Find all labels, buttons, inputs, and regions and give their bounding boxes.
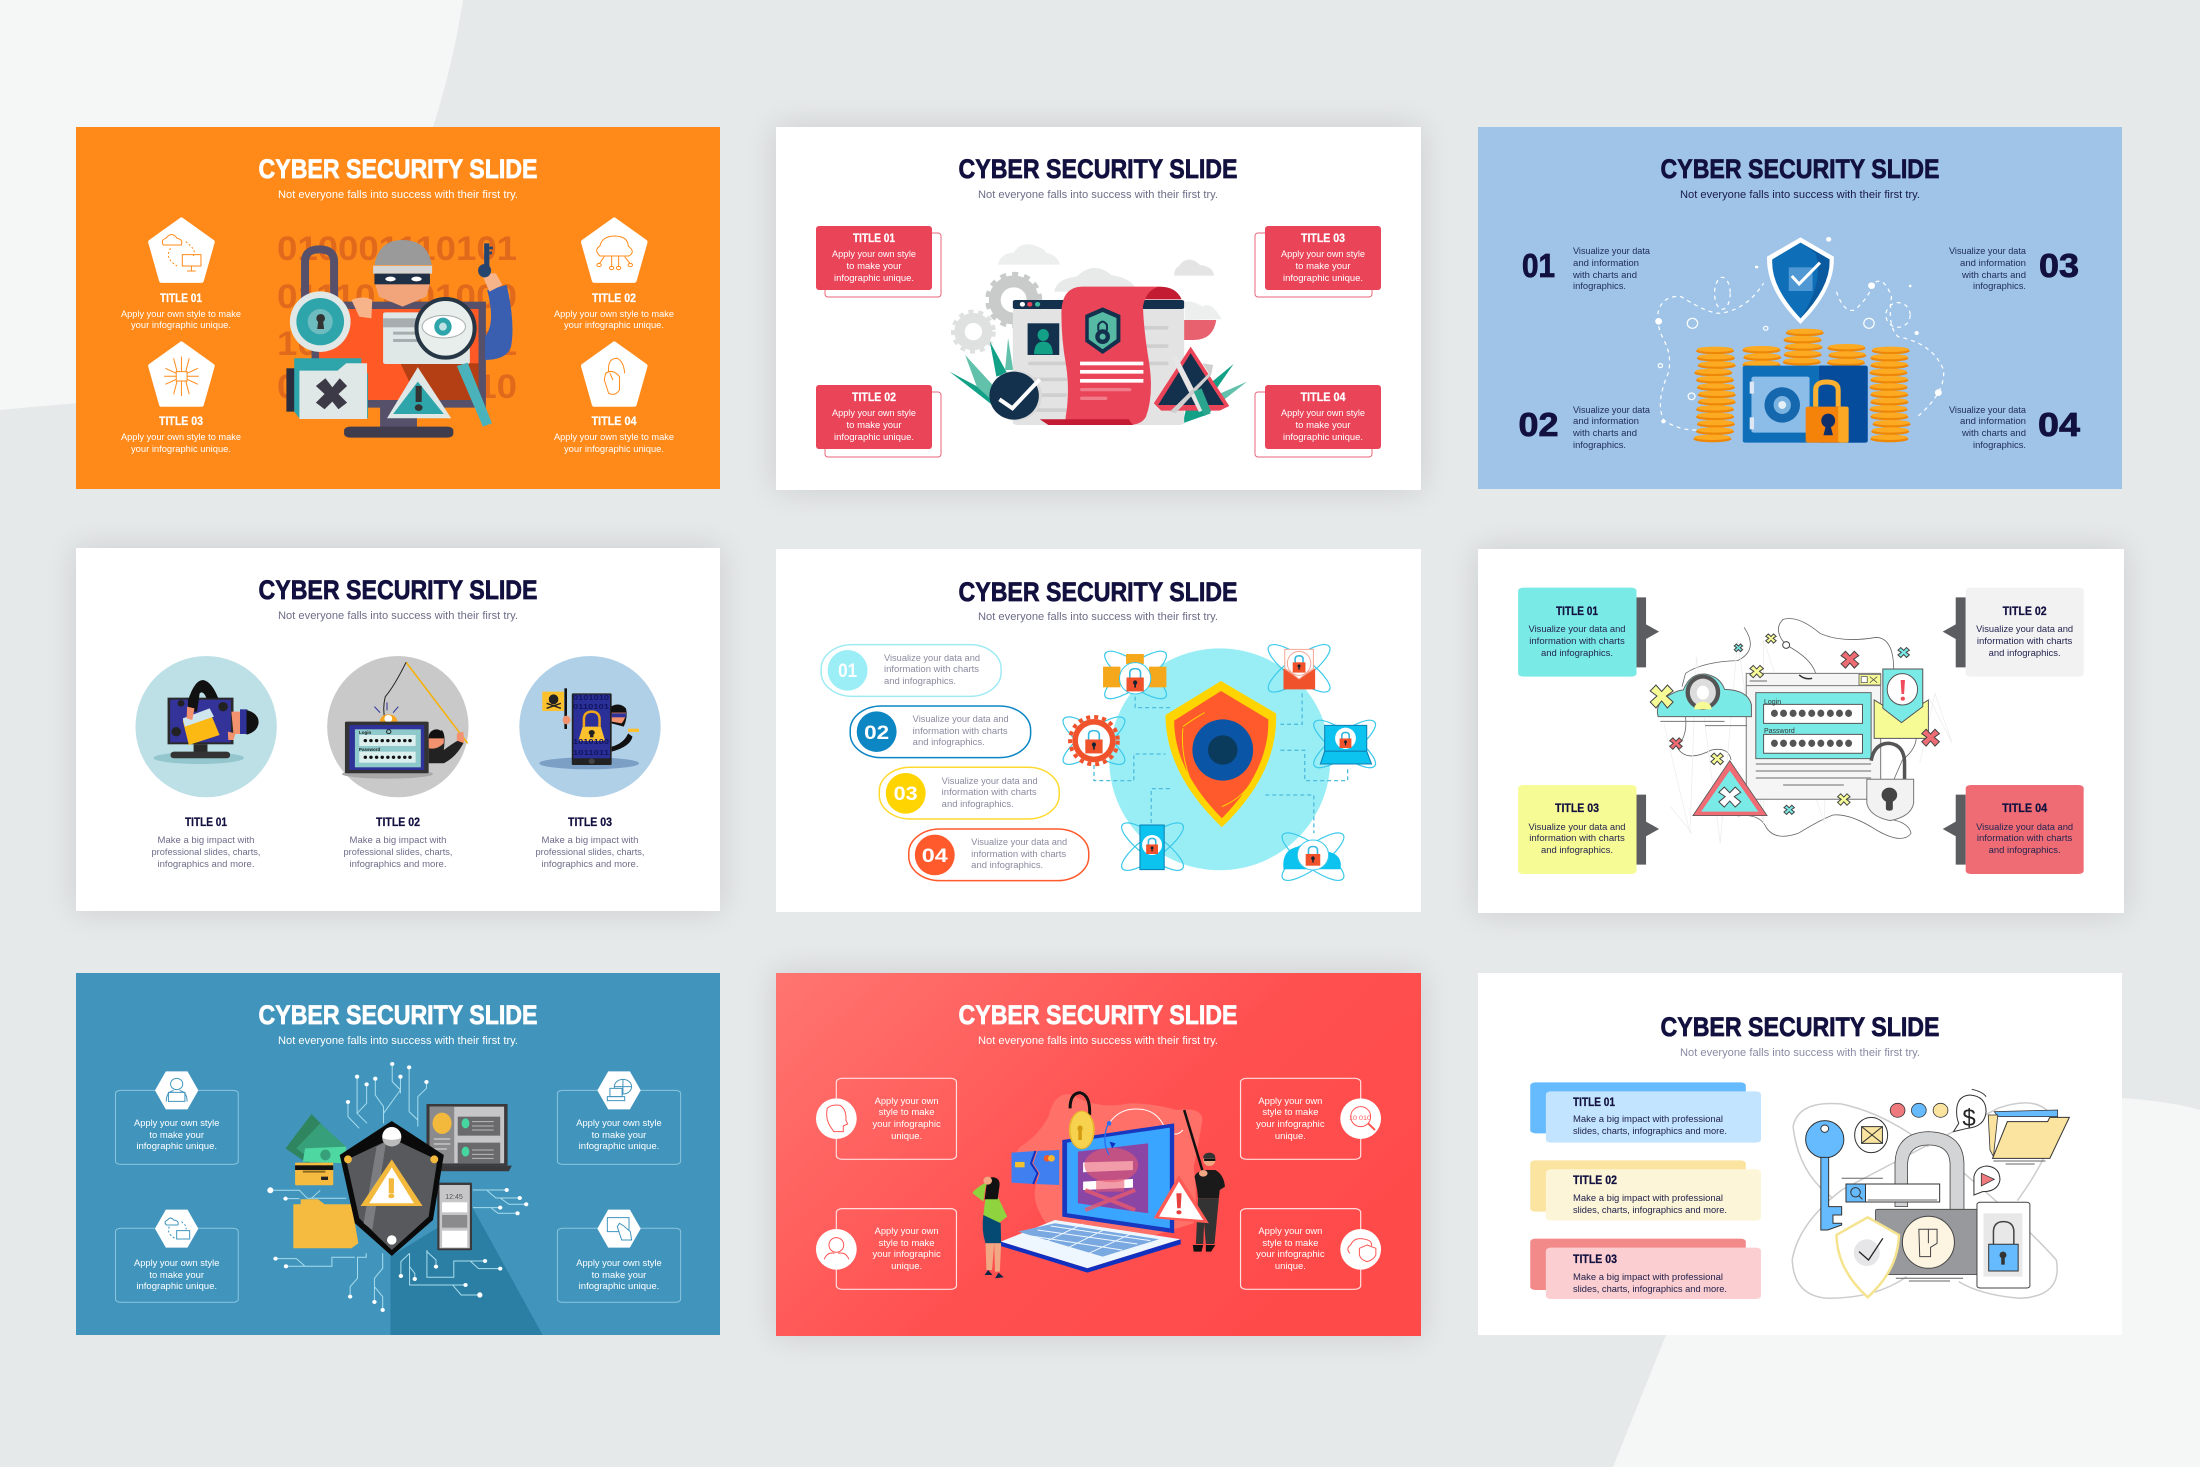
title: CYBER SECURITY SLIDE	[958, 1000, 1238, 1030]
binary text on phone: 0110101	[573, 702, 609, 711]
card: title 02	[1530, 1160, 1761, 1221]
binary digits background: 010010101110	[277, 368, 517, 406]
panel background	[776, 127, 1421, 490]
item: number 03: with charts and	[1961, 270, 2026, 280]
box: bottom left	[816, 1209, 956, 1289]
callout: title 02: Visualize your data and	[1976, 624, 2073, 634]
box: top left: unique.	[891, 1131, 922, 1141]
box: top right: your infographic	[1256, 1119, 1325, 1129]
panel shadow	[776, 127, 1421, 490]
callout: title 04: Visualize your data and	[1976, 822, 2073, 832]
box: title 04: to make your	[1296, 420, 1351, 430]
panel: slide 3 blue with coins	[1478, 127, 2122, 489]
item: number 03: Visualize your data	[1949, 246, 2026, 256]
callout: title 01: information with charts	[1529, 636, 1625, 646]
callout: title 02	[1943, 588, 2084, 677]
box: bottom right: Apply your own	[1258, 1226, 1323, 1236]
panel shadow	[1478, 549, 2124, 913]
box: title 01: Apply your own style	[832, 249, 916, 259]
item: title 02	[344, 815, 452, 869]
illustration: circle 1 hacker stealing folder	[135, 656, 277, 797]
binary text on phone	[573, 693, 609, 757]
item: title 01: TITLE 01	[185, 815, 227, 829]
card: title 03	[1530, 1239, 1761, 1299]
box: bottom left: style to make	[879, 1238, 935, 1248]
background light shape: top left	[0, 0, 463, 410]
card: title 01: TITLE 01	[1573, 1095, 1615, 1109]
pill 01: information with charts	[884, 664, 980, 674]
title: CYBER SECURITY SLIDE	[1660, 154, 1940, 184]
box: bottom left: infographic unique.	[136, 1281, 217, 1291]
box: title 01: TITLE 01	[853, 231, 895, 245]
item: title 04: your infographic unique.	[564, 444, 664, 454]
item: title 01: your infographic unique.	[131, 320, 231, 330]
pill 03	[879, 767, 1059, 819]
box: bottom left: to make your	[149, 1270, 204, 1280]
item: number 02	[1518, 405, 1650, 450]
callout: title 04: and infographics.	[1989, 845, 2061, 855]
subtitle: Not everyone falls into success with their first try.	[978, 1035, 1218, 1047]
background light shape: bottom right	[1613, 1098, 2200, 1467]
pill 03: 03	[894, 784, 918, 805]
title: CYBER SECURITY SLIDE	[958, 154, 1238, 184]
subtitle: Not everyone falls into success with their first try.	[1680, 1047, 1920, 1059]
item: number 01: and information	[1573, 258, 1639, 268]
box: title 03: to make your	[1296, 261, 1351, 271]
panel background	[76, 973, 720, 1335]
illustration: phishing login window	[1650, 618, 1952, 843]
pill 01: 01	[838, 661, 857, 682]
callout: title 03: TITLE 03	[1555, 801, 1599, 815]
label: phone clock: 12:45	[445, 1194, 463, 1201]
panel: slide 5 white with pills and shield	[776, 549, 1421, 912]
item: number 01: Visualize your data	[1573, 246, 1650, 256]
box: bottom left: unique.	[891, 1261, 922, 1271]
pill 03: Visualize your data and	[942, 776, 1038, 786]
title: CYBER SECURITY SLIDE	[258, 1000, 538, 1030]
box: top left: to make your	[149, 1130, 204, 1140]
box: title 03: Apply your own style	[1281, 249, 1365, 259]
callout: title 03: and infographics.	[1541, 845, 1613, 855]
subtitle: Not everyone falls into success with their first try.	[1680, 189, 1920, 201]
box: bottom right: infographic unique.	[579, 1281, 659, 1291]
panel background	[1478, 127, 2122, 489]
binary digits background: 010001110101	[277, 230, 517, 268]
item: title 01: Apply your own style to make	[121, 309, 241, 319]
pill 01: Visualize your data and	[884, 653, 980, 663]
item: title 01: TITLE 01	[160, 291, 202, 305]
box: title 04: Apply your own style	[1281, 408, 1365, 418]
box: top left: infographic unique.	[136, 1141, 217, 1151]
icon: cloud to monitor pentagon	[151, 220, 212, 280]
box: title 03	[1255, 226, 1381, 297]
illustration: hacked laptop	[973, 1093, 1225, 1278]
box: bottom left: Apply your own	[875, 1226, 939, 1236]
box: top right: to make your	[592, 1130, 646, 1140]
title: CYBER SECURITY SLIDE	[258, 154, 538, 184]
illustration: security document	[950, 244, 1247, 425]
item: title 03: infographics and more.	[542, 859, 638, 869]
box: title 04: infographic unique.	[1283, 432, 1363, 442]
box: title 02	[816, 385, 941, 457]
box: title 01: to make your	[846, 261, 902, 271]
box: bottom right: your infographic	[1256, 1249, 1325, 1259]
box: bottom right: to make your	[592, 1270, 646, 1280]
box: title 01	[816, 226, 941, 297]
box: title 03: TITLE 03	[1301, 231, 1345, 245]
item: number 04: 04	[2038, 406, 2081, 443]
box: top right: Apply your own	[1258, 1096, 1323, 1106]
box: title 04	[1255, 385, 1381, 457]
binary text on phone: 1010100	[573, 737, 609, 746]
card: title 03: slides, charts, infographics and more.	[1573, 1284, 1727, 1294]
illustration: circle 3 phone with lock	[519, 656, 661, 797]
callout: title 04: information with charts	[1977, 833, 2073, 843]
subtitle: Not everyone falls into success with their first try.	[978, 611, 1218, 623]
label: login: Login	[1764, 699, 1781, 706]
panel: slide 6 white with four callouts	[1478, 549, 2124, 913]
card: title 02: Make a big impact with professional	[1573, 1193, 1723, 1203]
item: number 02: and information	[1573, 416, 1639, 426]
box: title 04: TITLE 04	[1300, 390, 1346, 404]
binary digits background	[277, 230, 517, 406]
icon: chip pentagon	[151, 344, 212, 404]
item: title 03: Make a big impact with	[542, 835, 639, 845]
box: bottom left: Apply your own style	[134, 1258, 220, 1268]
box: bottom right: unique.	[1275, 1261, 1306, 1271]
item: title 02: infographics and more.	[350, 859, 446, 869]
card: title 03: TITLE 03	[1573, 1252, 1617, 1266]
item: title 03	[536, 815, 644, 869]
box: top left	[116, 1071, 238, 1164]
pill 03: information with charts	[942, 787, 1037, 797]
panel background	[776, 549, 1421, 912]
title: CYBER SECURITY SLIDE	[1660, 1012, 1940, 1042]
callout: title 02: information with charts	[1977, 636, 2073, 646]
panel shadow	[776, 973, 1421, 1336]
item: title 02: TITLE 02	[376, 815, 420, 829]
box: top left: your infographic	[872, 1119, 942, 1129]
box: bottom right	[1241, 1209, 1381, 1289]
callout: title 03	[1518, 785, 1659, 874]
box: top right: style to make	[1262, 1107, 1319, 1117]
callout: title 02: TITLE 02	[2003, 604, 2047, 618]
item: number 04: and information	[1960, 416, 2026, 426]
box: title 02: Apply your own style	[832, 408, 916, 418]
pill 04: Visualize your data and	[971, 837, 1067, 847]
callout: title 01: Visualize your data and	[1528, 624, 1626, 634]
item: number 02: infographics.	[1573, 440, 1626, 450]
item: number 04: Visualize your data	[1949, 405, 2026, 415]
item: title 02: your infographic unique.	[564, 320, 664, 330]
item: title 02: TITLE 02	[592, 291, 636, 305]
panel: slide 8 red with laptop	[776, 973, 1421, 1336]
binary text on phone: 1011011	[573, 748, 609, 757]
item: number 03: 03	[2039, 247, 2079, 284]
panel shadow	[76, 548, 720, 911]
illustration: shield and secured devices	[1055, 639, 1383, 886]
pill 04: information with charts	[971, 849, 1067, 859]
item: title 02: Make a big impact with	[350, 835, 447, 845]
subtitle: Not everyone falls into success with their first try.	[978, 189, 1218, 201]
item: number 04	[1949, 405, 2081, 450]
label: password: Password	[359, 747, 381, 752]
pill 02: and infographics.	[913, 737, 985, 747]
label: password: Password	[1764, 728, 1795, 735]
item: title 01: professional slides, charts,	[152, 847, 260, 857]
subtitle: Not everyone falls into success with their first try.	[278, 1035, 518, 1047]
panel background	[76, 127, 720, 489]
pill 01	[821, 645, 1001, 696]
panel background	[1478, 549, 2124, 913]
box: top left: Apply your own	[875, 1096, 939, 1106]
card: title 01: Make a big impact with professional	[1573, 1114, 1723, 1124]
item: number 01: infographics.	[1573, 281, 1626, 291]
item: title 01	[152, 815, 260, 869]
illustration: shield, coins and safe	[1655, 237, 1944, 443]
item: title 03	[121, 344, 241, 454]
box: top right: unique.	[1275, 1131, 1306, 1141]
item: number 01	[1522, 246, 1650, 291]
callout: title 03: Visualize your data and	[1528, 822, 1626, 832]
panel: slide 4 white with three circles	[76, 548, 720, 911]
callout: title 02: and infographics.	[1989, 648, 2061, 658]
callout: title 01: and infographics.	[1541, 648, 1613, 658]
pill 03: and infographics.	[942, 799, 1014, 809]
pill 04: 04	[922, 846, 948, 867]
box: top right: infographic unique.	[579, 1141, 659, 1151]
pill 02: 02	[864, 723, 889, 744]
box: top left: style to make	[879, 1107, 935, 1117]
item: title 02: Apply your own style to make	[554, 309, 674, 319]
binary text in icon: 10 010	[1349, 1116, 1372, 1122]
item: number 01: 01	[1522, 247, 1555, 284]
item: title 02: professional slides, charts,	[344, 847, 452, 857]
item: title 01	[121, 220, 241, 330]
binary digits background: 100110001101	[277, 325, 517, 363]
box: bottom right: Apply your own style	[576, 1258, 662, 1268]
panel: slide 7 teal with circuit shield	[76, 973, 720, 1335]
box: top right: Apply your own style	[576, 1118, 662, 1128]
panel: slide 2 white with red boxes	[776, 127, 1421, 490]
pill 02: information with charts	[913, 726, 1008, 736]
item: title 03: your infographic unique.	[131, 444, 231, 454]
item: number 04: with charts and	[1961, 428, 2026, 438]
card: title 02: slides, charts, infographics and more.	[1573, 1205, 1727, 1215]
title: CYBER SECURITY SLIDE	[258, 575, 538, 605]
box: title 02: to make your	[846, 420, 902, 430]
item: title 01: infographics and more.	[158, 859, 254, 869]
item: number 02: Visualize your data	[1573, 405, 1650, 415]
box: top left: Apply your own style	[134, 1118, 220, 1128]
item: title 04: Apply your own style to make	[554, 432, 674, 442]
item: number 03: and information	[1960, 258, 2026, 268]
panel background	[776, 973, 1421, 1336]
item: title 03: professional slides, charts,	[536, 847, 644, 857]
item: number 01: with charts and	[1572, 270, 1637, 280]
title: CYBER SECURITY SLIDE	[958, 577, 1238, 607]
box: top right	[1241, 1078, 1381, 1159]
card: title 03: Make a big impact with professional	[1573, 1272, 1723, 1282]
item: number 02: 02	[1518, 406, 1558, 443]
item: title 02	[554, 220, 674, 330]
item: title 04: TITLE 04	[592, 414, 637, 428]
panel background	[1478, 973, 2122, 1335]
item: number 03: infographics.	[1973, 281, 2026, 291]
callout: title 04: TITLE 04	[2002, 801, 2047, 815]
subtitle: Not everyone falls into success with their first try.	[278, 189, 518, 201]
box: bottom left: your infographic	[872, 1249, 942, 1259]
box: title 02: infographic unique.	[834, 432, 914, 442]
callout: title 01: TITLE 01	[1556, 604, 1598, 618]
item: title 01: Make a big impact with	[158, 835, 255, 845]
box: bottom right	[557, 1210, 681, 1302]
box: title 02: TITLE 02	[852, 390, 896, 404]
item: title 03: Apply your own style to make	[121, 432, 241, 442]
box: bottom right: style to make	[1262, 1238, 1319, 1248]
card: title 02: TITLE 02	[1573, 1173, 1617, 1187]
box: top left	[816, 1078, 956, 1159]
pill 02: Visualize your data and	[913, 714, 1009, 724]
box: top right	[557, 1071, 681, 1164]
subtitle: Not everyone falls into success with their first try.	[278, 610, 518, 622]
item: title 03: TITLE 03	[568, 815, 612, 829]
pill 01: and infographics.	[884, 676, 956, 686]
panel: slide 1 orange	[76, 127, 720, 489]
illustration: circle 2 phishing login	[327, 656, 469, 797]
item: number 04: infographics.	[1973, 440, 2026, 450]
symbol: dollar: $	[1962, 1105, 1976, 1132]
callout: title 04	[1943, 785, 2084, 874]
illustration: thief at monitor	[286, 240, 512, 438]
box: title 01: infographic unique.	[834, 273, 914, 283]
item: title 03: TITLE 03	[159, 414, 203, 428]
callout: title 03: information with charts	[1529, 833, 1625, 843]
panel background	[76, 548, 720, 911]
card: title 01: slides, charts, infographics and more.	[1573, 1126, 1727, 1136]
pill 02	[850, 706, 1031, 758]
box: title 03: infographic unique.	[1283, 273, 1363, 283]
panel: slide 9 white with padlock	[1478, 973, 2122, 1335]
item: number 02: with charts and	[1572, 428, 1637, 438]
pill 04: and infographics.	[971, 860, 1043, 870]
pill 04	[909, 829, 1089, 881]
illustration: padlock, key and shield	[1792, 1089, 2069, 1298]
icon: cloud network pentagon	[583, 220, 645, 280]
icon: mouse pentagon	[583, 344, 645, 404]
item: title 04	[554, 344, 674, 454]
box: bottom left	[116, 1210, 238, 1302]
illustration: circuit shield	[267, 1062, 543, 1335]
binary text on phone: 0101010	[573, 693, 609, 702]
binary digits background: 011101101000	[277, 278, 517, 316]
label: login: Login	[359, 730, 371, 735]
callout: title 01	[1518, 588, 1659, 677]
card: title 01	[1530, 1082, 1761, 1143]
item: number 03	[1949, 246, 2079, 291]
